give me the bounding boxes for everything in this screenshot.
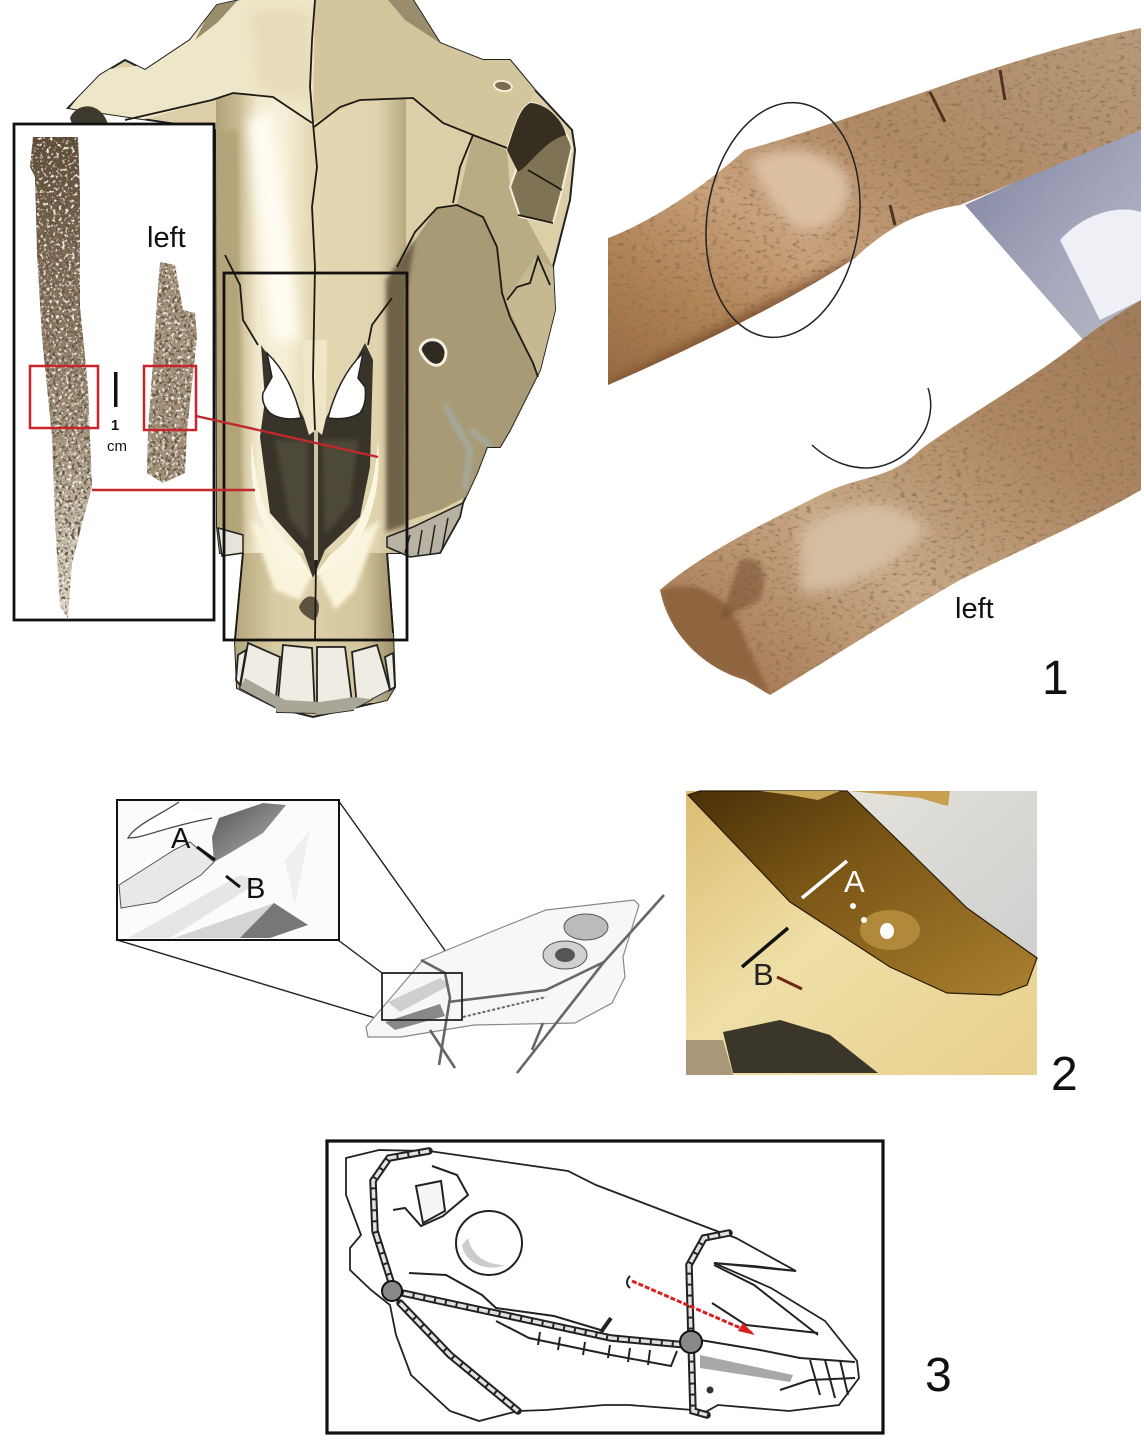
arc annotation (812, 388, 931, 468)
cream rim around cavity (251, 440, 379, 578)
muzzle band shading (700, 1355, 793, 1382)
black frame over muzzle (224, 273, 407, 640)
temporal bone piece (416, 1181, 445, 1223)
skull shaded layers (60, 0, 560, 703)
figure number 1: 1 (1042, 652, 1069, 705)
sketch shading (385, 914, 608, 1030)
inset panel: cheekpiece bones (14, 124, 214, 620)
photo cavity (688, 791, 1037, 995)
metal plate (965, 125, 1141, 342)
upper bone (608, 28, 1141, 385)
zoom inset (117, 800, 339, 940)
rope highlights (373, 1151, 729, 1415)
brow foramen (493, 80, 513, 92)
rope bridle (421, 895, 664, 1073)
central nasal cavity dark (260, 343, 373, 578)
tooth shading (240, 678, 390, 715)
figure number 3: 3 (925, 1349, 952, 1402)
rope bridle (373, 1151, 729, 1415)
scale label: cm (107, 438, 127, 455)
nostril mark (706, 1386, 714, 1394)
upper molars left (218, 528, 243, 556)
photo label A: A (844, 864, 865, 899)
lower bone (650, 295, 1144, 700)
incisor teeth (236, 643, 395, 715)
temporal shape (393, 1166, 468, 1226)
scale label (107, 417, 127, 455)
bone spicules (850, 791, 950, 806)
skull outline (346, 1150, 859, 1421)
orbit (456, 1211, 522, 1275)
photo: bones with metal background (600, 20, 1144, 705)
illustration: horse skull front view (60, 0, 575, 717)
red highlight boxes (30, 366, 196, 430)
panel 2: photo (686, 791, 1037, 1075)
scale label: 1 (111, 417, 119, 434)
red connector lines (92, 416, 378, 490)
zoom inset: B (246, 873, 265, 905)
rope knots (382, 1281, 702, 1353)
detail rectangle (382, 973, 462, 1020)
photo lower dark hole (723, 1020, 878, 1073)
nasal opening right (328, 353, 365, 419)
nasal septum (314, 430, 318, 560)
panel 2: drawing with inset (117, 800, 664, 1073)
upper molars right (387, 503, 463, 557)
skull base shape (68, 0, 575, 717)
photo background (847, 791, 1037, 958)
zygomatic and tooth line (409, 1263, 855, 1398)
bridled skull sketch (366, 900, 639, 1037)
skull suture lines (125, 0, 562, 640)
orbit dark (507, 103, 572, 223)
nasal bone spur (303, 340, 327, 435)
photo label B: B (753, 957, 774, 992)
scale bar (114, 372, 118, 407)
panel 3: bridled skull drawing (327, 1141, 883, 1433)
long bone (30, 137, 92, 618)
nasal opening left (263, 353, 301, 419)
zoom lines (117, 800, 461, 1020)
inset labels: A (171, 823, 191, 855)
top-left brow notch (70, 106, 108, 124)
label: left: left (147, 222, 186, 254)
left bone (147, 262, 197, 483)
label: left: left (955, 593, 994, 625)
figure number 2: 2 (1051, 1048, 1078, 1101)
red arrow (632, 1281, 755, 1335)
incisive foramen (299, 596, 319, 620)
oval annotation (691, 93, 875, 347)
cavity inner shading (275, 440, 358, 540)
infraorbital foramen (420, 340, 446, 365)
